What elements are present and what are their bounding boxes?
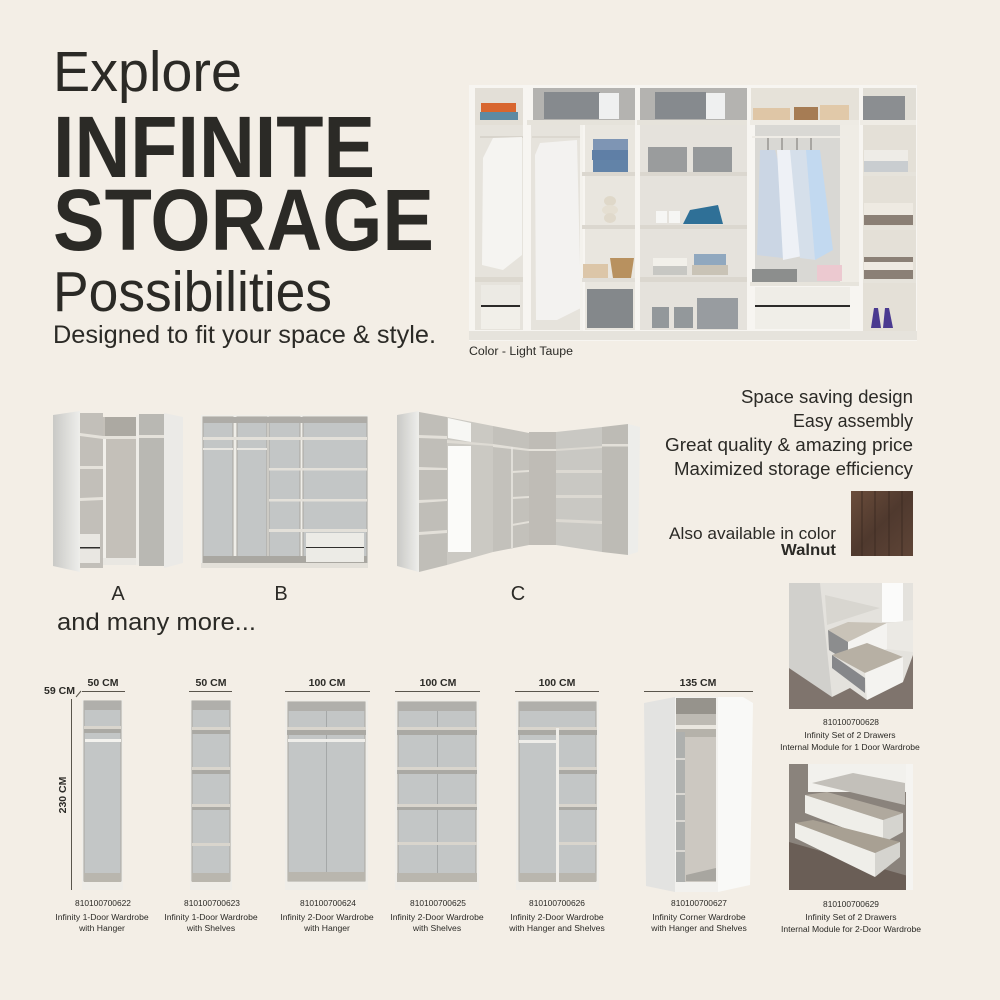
column 3 — [637, 88, 747, 330]
caption: 810100700624 — [300, 898, 356, 908]
caption: with Hanger and Shelves — [508, 923, 605, 933]
caption 629: Infinity Set of 2 Drawers — [805, 912, 897, 922]
caption 628: 810100700628 — [823, 717, 879, 727]
and many more: and many more... — [57, 609, 256, 636]
drawer photo 629 — [789, 764, 913, 890]
caption: with Shelves — [186, 923, 235, 933]
corner wardrobe — [644, 697, 753, 892]
label C: C — [511, 583, 525, 605]
caption: Infinity 2-Door Wardrobe — [510, 912, 604, 922]
depth dimension — [44, 685, 81, 890]
title: Possibilities — [53, 260, 332, 324]
module 626 — [508, 677, 605, 933]
column 2 — [527, 88, 635, 333]
configuration A — [53, 411, 183, 572]
color note — [669, 524, 837, 559]
title — [53, 40, 434, 324]
title: INFINITE — [53, 99, 375, 196]
width 50: 50 CM — [88, 677, 119, 689]
color note: Also available in color — [669, 524, 836, 543]
main wardrobe photo — [469, 85, 917, 341]
feature list — [665, 387, 913, 479]
wardrobe — [82, 700, 123, 890]
caption: with Hanger — [78, 923, 125, 933]
caption 629 — [781, 899, 921, 934]
wardrobe bases — [469, 331, 917, 340]
caption — [390, 898, 484, 933]
wardrobe — [395, 700, 479, 890]
width 135: 135 CM — [680, 677, 717, 689]
caption 628 — [780, 717, 920, 752]
module 627 — [644, 677, 753, 933]
width 50 — [189, 677, 232, 692]
module 624 — [280, 677, 374, 933]
caption: with Hanger — [303, 923, 350, 933]
caption 629: Internal Module for 2-Door Wardrobe — [781, 924, 921, 934]
caption: 810100700622 — [75, 898, 131, 908]
width 100 — [395, 677, 480, 692]
caption: with Shelves — [412, 923, 461, 933]
caption: Infinity 1-Door Wardrobe — [164, 912, 258, 922]
module 622 — [55, 677, 149, 933]
caption: Infinity 2-Door Wardrobe — [390, 912, 484, 922]
caption: 810100700625 — [410, 898, 466, 908]
width 100: 100 CM — [420, 677, 457, 689]
caption: Infinity Corner Wardrobe — [652, 912, 746, 922]
caption: 810100700623 — [184, 898, 240, 908]
column 1 — [475, 88, 523, 330]
caption: Infinity 2-Door Wardrobe — [280, 912, 374, 922]
feature list: Maximized storage efficiency — [674, 459, 913, 479]
module 623 — [164, 677, 258, 933]
title: Explore — [53, 40, 242, 104]
caption 628: Internal Module for 1 Door Wardrobe — [780, 742, 920, 752]
width 100: 100 CM — [539, 677, 576, 689]
label B: B — [274, 583, 288, 605]
caption 629: 810100700629 — [823, 899, 879, 909]
width 50: 50 CM — [196, 677, 227, 689]
column 5 — [860, 88, 916, 331]
width 50 — [82, 677, 125, 692]
drawer photo 628 — [789, 583, 913, 709]
title: STORAGE — [53, 172, 434, 269]
photo caption: Color - Light Taupe — [469, 346, 573, 358]
feature list: Space saving design — [741, 387, 913, 407]
width 100 — [285, 677, 370, 692]
column 4 — [750, 88, 859, 329]
caption: Infinity 1-Door Wardrobe — [55, 912, 149, 922]
width 100: 100 CM — [309, 677, 346, 689]
label A: A — [111, 583, 125, 605]
feature list: Great quality & amazing price — [665, 435, 913, 455]
width 135 — [644, 677, 753, 692]
color note: Walnut — [781, 542, 837, 559]
module 625 — [390, 677, 484, 933]
caption: with Hanger and Shelves — [650, 923, 747, 933]
caption — [55, 898, 149, 933]
depth dimension: 59 CM — [44, 685, 75, 697]
configuration B — [201, 415, 368, 568]
caption 628: Infinity Set of 2 Drawers — [804, 730, 896, 740]
caption: 810100700626 — [529, 898, 585, 908]
walnut swatch — [851, 491, 913, 556]
wardrobe — [285, 700, 368, 890]
caption — [650, 898, 747, 933]
caption — [280, 898, 374, 933]
caption — [508, 898, 605, 933]
height dimension: 230 CM — [57, 776, 69, 813]
configuration C — [397, 411, 640, 572]
feature list: Easy assembly — [793, 411, 913, 431]
wardrobe — [190, 700, 232, 890]
caption — [164, 898, 258, 933]
subtitle: Designed to fit your space & style. — [53, 321, 436, 349]
width 100 — [515, 677, 599, 692]
wardrobe — [516, 700, 599, 890]
caption: 810100700627 — [671, 898, 727, 908]
